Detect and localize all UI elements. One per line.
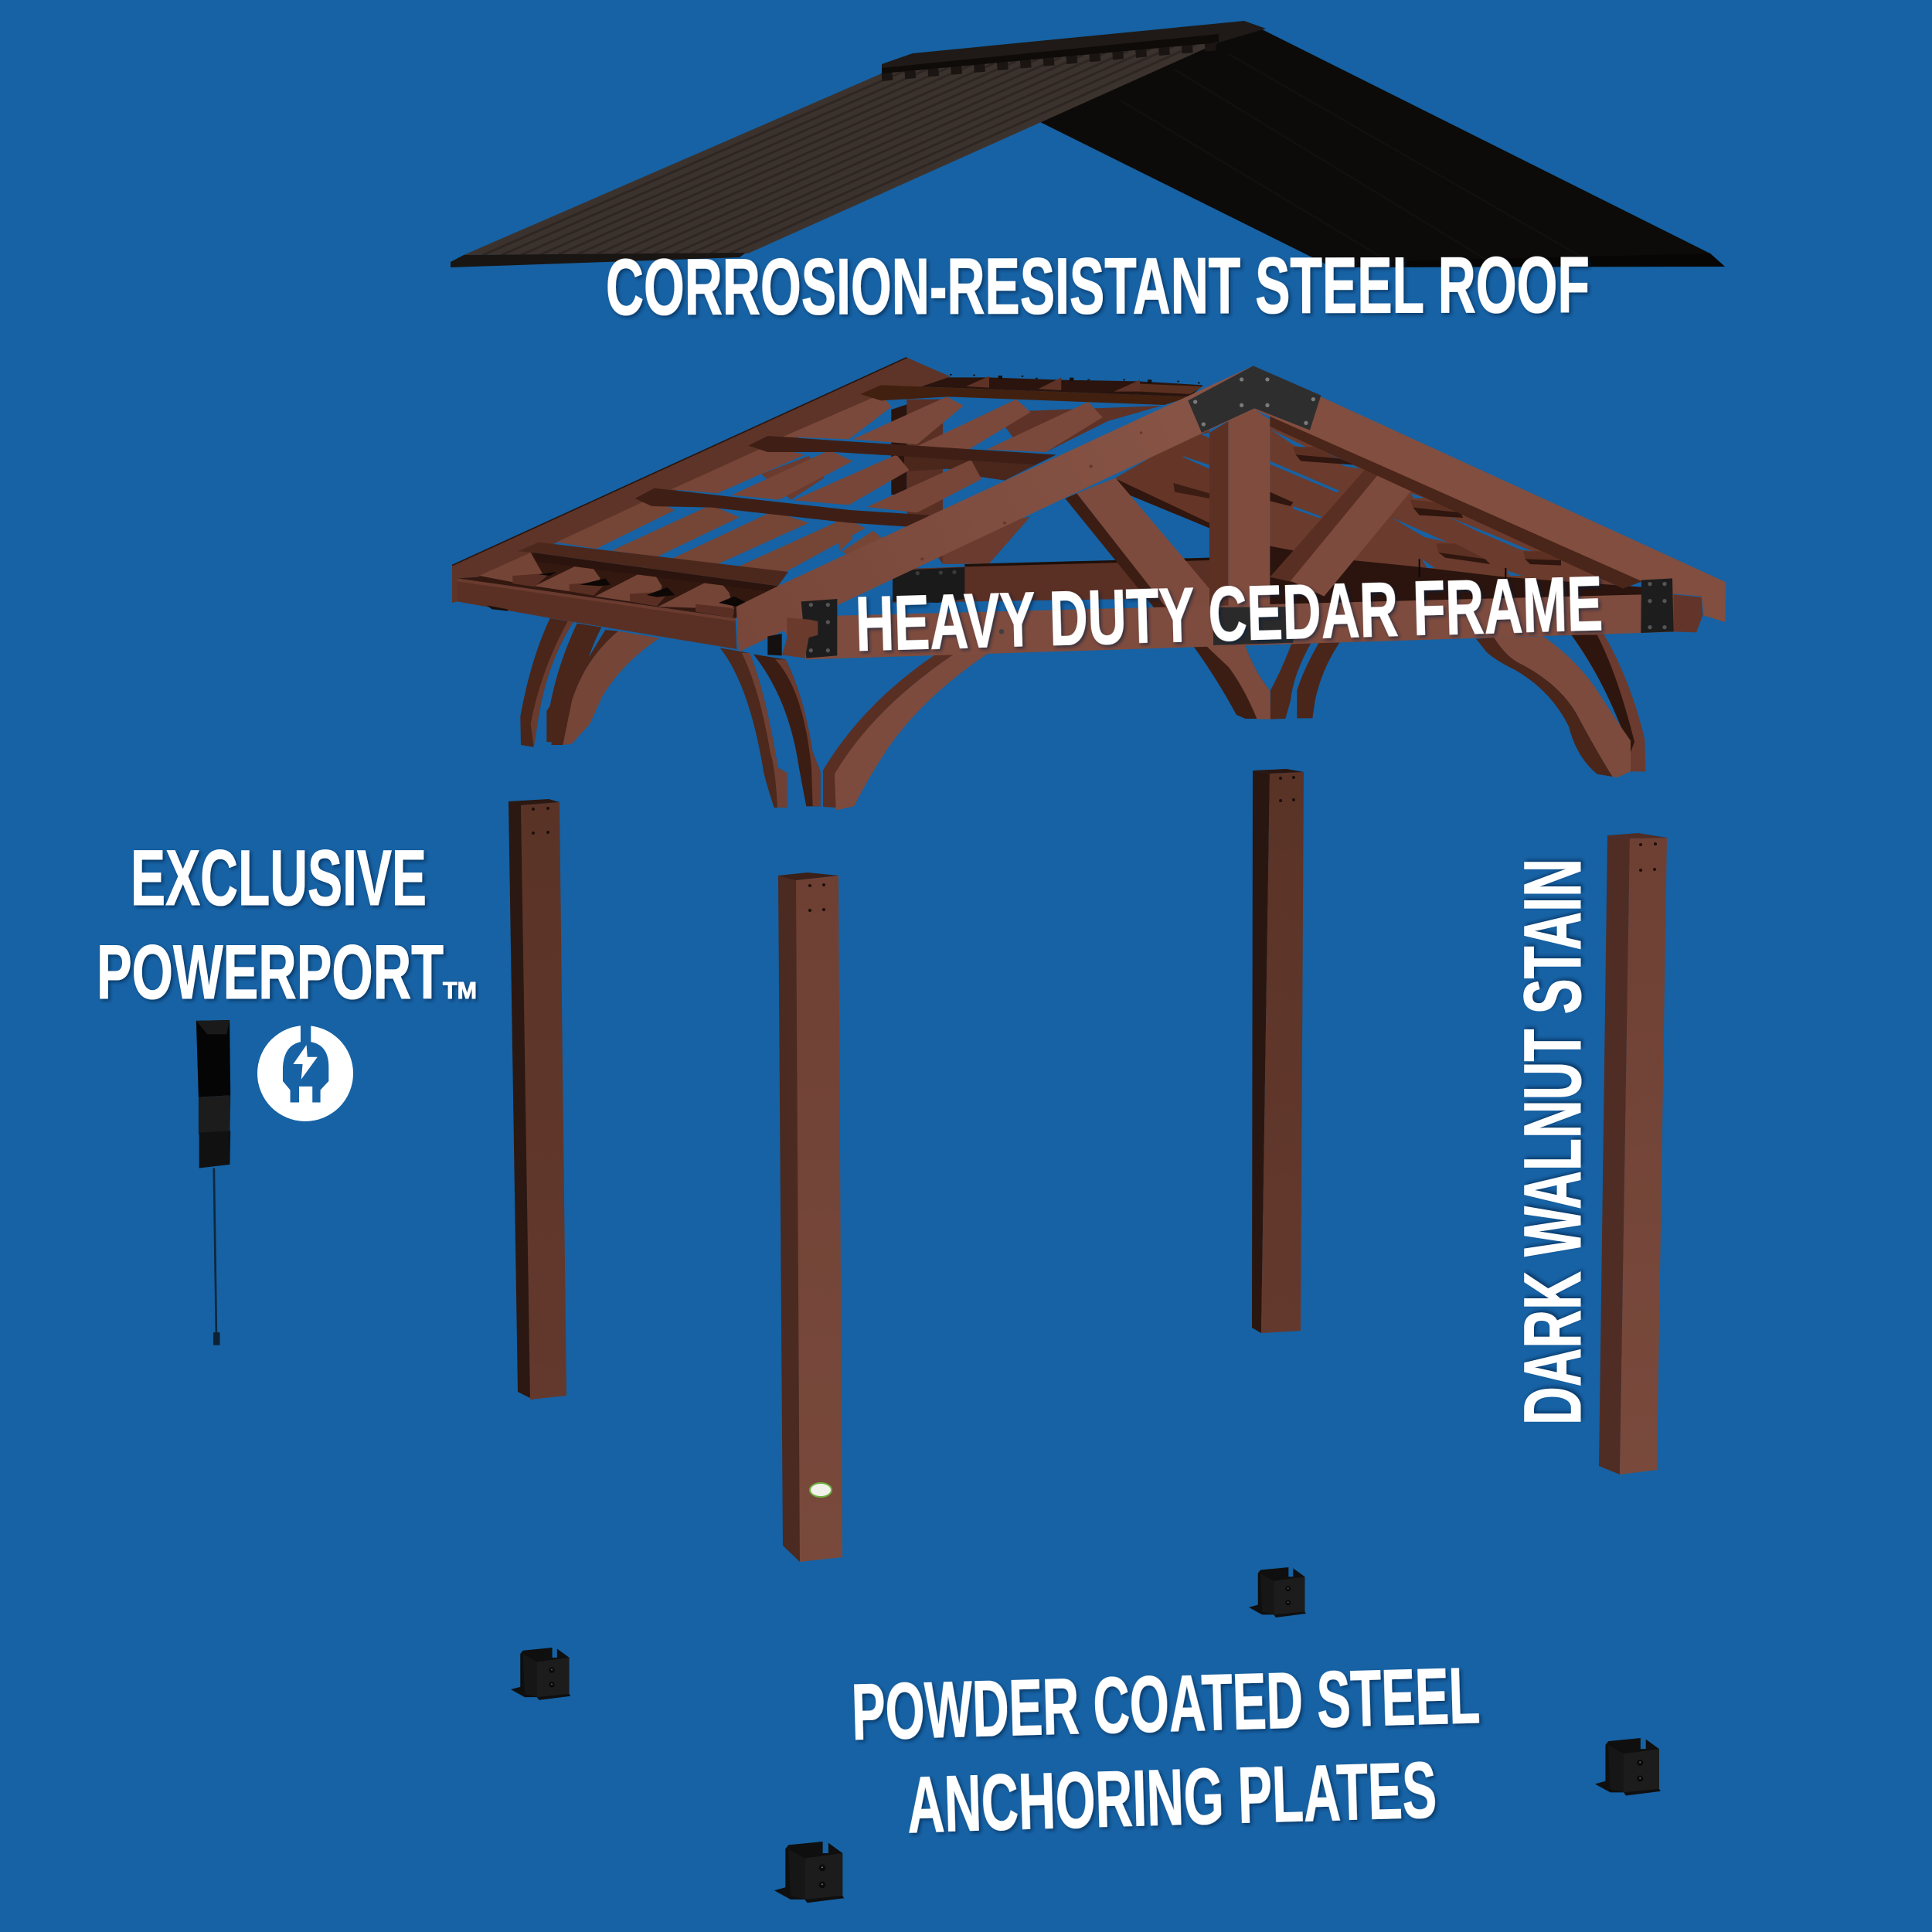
king post lit bbox=[1228, 408, 1270, 609]
panel: cedar frame bbox=[452, 358, 1726, 810]
right slot d bbox=[1410, 493, 1424, 498]
right rear brace shadow bbox=[1571, 635, 1634, 752]
device top highlight bbox=[196, 1020, 230, 1034]
mid brace 2 bbox=[753, 655, 821, 806]
left big brace bbox=[563, 631, 659, 745]
center braces bbox=[1192, 643, 1339, 719]
right rear brace bbox=[1571, 634, 1645, 771]
right front brace underside bbox=[1476, 638, 1613, 777]
long beams row 2 bbox=[671, 446, 981, 512]
heading: stain: DARK WALNUT STAIN bbox=[1508, 859, 1598, 1425]
panel: steel roof bbox=[451, 21, 1725, 267]
anchoring plate near post 3 bbox=[1249, 1567, 1306, 1617]
post 3 holes bbox=[1279, 776, 1295, 802]
purlin 1 shadow bbox=[533, 553, 778, 591]
right truss brace bbox=[1291, 471, 1416, 597]
king post shade bbox=[1209, 421, 1228, 609]
gable top edge bbox=[452, 358, 906, 566]
post 3 side bbox=[1252, 770, 1270, 1333]
rear post dark bbox=[891, 404, 906, 495]
front eave beam bbox=[457, 578, 736, 649]
post 2 logo bbox=[810, 1483, 832, 1497]
dark block below rafter bbox=[767, 634, 782, 655]
heading: powerport: POWERPORT bbox=[97, 929, 444, 1015]
rear plate bbox=[893, 567, 964, 603]
big mid brace side bbox=[823, 653, 956, 808]
center brace 3 bbox=[1297, 643, 1339, 718]
left truss brace bbox=[1077, 478, 1223, 608]
mid brace 1 lit strip bbox=[742, 653, 787, 808]
gable corner inner bbox=[881, 376, 922, 389]
icon: power plug bbox=[257, 1025, 353, 1121]
rear brace bbox=[943, 516, 1030, 564]
post 2 top bbox=[778, 872, 838, 880]
top row strip bbox=[881, 373, 1203, 396]
device middle bbox=[199, 1095, 230, 1134]
rear beam top edge bbox=[964, 558, 1209, 566]
bottom row hardware bbox=[539, 572, 747, 607]
rear lower fill behind truss bbox=[1167, 593, 1350, 609]
post 4 front bbox=[1620, 838, 1667, 1475]
left plate and end block bbox=[782, 599, 837, 658]
under roof right of king post bbox=[1209, 408, 1646, 609]
eave hanger bbox=[487, 605, 508, 611]
roof left face bbox=[464, 43, 1219, 255]
right slot e3 bbox=[1422, 559, 1435, 568]
post 2 front bbox=[796, 876, 842, 1562]
right slot e1 bbox=[1391, 517, 1447, 543]
rear post lit bbox=[906, 400, 943, 564]
roof screws bbox=[929, 373, 1200, 383]
left truss brace side bbox=[1065, 493, 1167, 608]
top row bumps bbox=[966, 376, 989, 388]
plug bolt bbox=[293, 1045, 318, 1080]
left brace 1 bbox=[520, 618, 573, 747]
post 4 bbox=[1599, 833, 1667, 1475]
front rafter bbox=[736, 366, 1253, 651]
rafter knots bbox=[920, 431, 1142, 560]
left under dark band bbox=[1117, 479, 1209, 528]
post 2 side bbox=[778, 876, 800, 1562]
bottom row blocks bbox=[512, 573, 734, 617]
right main rafter bbox=[1253, 366, 1726, 622]
right slot a bbox=[1270, 429, 1360, 469]
left and middle braces bbox=[520, 618, 991, 810]
rear plate bolts bbox=[916, 570, 957, 575]
long beams row 3 bbox=[783, 394, 1103, 452]
right under region bbox=[1270, 420, 1646, 603]
center brace 1 bbox=[1206, 643, 1270, 719]
heading: plates line 1: POWDER COATED STEEL bbox=[850, 1651, 1481, 1757]
center plate bbox=[1213, 607, 1293, 645]
center brace 1 underside bbox=[1192, 643, 1270, 719]
left end block bbox=[782, 617, 818, 658]
post 1 holes bbox=[532, 807, 549, 835]
right slot e2 bbox=[1447, 516, 1532, 551]
left under slot bbox=[1182, 456, 1209, 469]
big mid brace bbox=[835, 651, 991, 810]
front horizontal beam bbox=[783, 594, 1673, 659]
post 4 holes bbox=[1639, 842, 1657, 872]
post 2 bbox=[778, 872, 842, 1562]
right rafter underside bbox=[1270, 413, 1644, 589]
icon disc bbox=[257, 1026, 353, 1121]
anchoring plate near post 2 bbox=[774, 1842, 844, 1903]
left plate bbox=[801, 599, 837, 658]
roof corrugation ribs bbox=[483, 45, 1196, 255]
eave interior bbox=[457, 553, 778, 618]
bottom row beams bbox=[479, 553, 734, 609]
cord plug bbox=[213, 1332, 219, 1345]
center brace 2 bbox=[1270, 643, 1311, 719]
left big brace underside bbox=[551, 630, 618, 745]
end block bbox=[1674, 594, 1702, 632]
purlin 4 bbox=[860, 385, 1190, 405]
ridge cap bbox=[882, 21, 1266, 73]
roof right face ribs bbox=[1121, 54, 1592, 263]
mid brace 2 lit strip bbox=[775, 659, 821, 806]
left under stub bbox=[1173, 483, 1209, 498]
roof right face bbox=[1028, 25, 1725, 267]
post 1 side bbox=[509, 801, 533, 1400]
heading: exclusive: EXCLUSIVE bbox=[131, 834, 427, 922]
eave top strip bbox=[457, 578, 736, 621]
heading: frame: HEAVY DUTY CEDAR FRAME bbox=[854, 560, 1604, 668]
right front brace bbox=[1494, 636, 1631, 777]
right truss brace side bbox=[1270, 466, 1381, 582]
post 1 front bbox=[521, 802, 566, 1400]
icon plug bbox=[283, 1025, 328, 1103]
dark under area bbox=[1270, 546, 1646, 605]
left under beams bbox=[1115, 425, 1209, 526]
post 1 bbox=[509, 799, 566, 1400]
ridge cap lower edge bbox=[882, 34, 1219, 73]
device lower bbox=[199, 1131, 230, 1168]
post 4 top bbox=[1607, 833, 1667, 838]
gusset plate bbox=[1188, 366, 1321, 433]
top row base bbox=[881, 377, 1203, 396]
purlin stubs bbox=[1293, 447, 1561, 560]
anchoring plate near post 1 bbox=[511, 1648, 570, 1700]
purlin 1 bbox=[518, 543, 788, 586]
right eave trim bbox=[1331, 253, 1725, 267]
right plate and end block bbox=[1641, 578, 1702, 633]
top row end bbox=[1140, 384, 1203, 394]
right plate bolts bbox=[1648, 582, 1667, 629]
right slot c bbox=[1293, 506, 1321, 519]
under frame middle bbox=[904, 456, 1036, 481]
purlin 3 bbox=[748, 436, 1056, 465]
diagonal under piece 1 bbox=[761, 456, 825, 500]
post 3 top bbox=[1253, 769, 1304, 774]
post 3 bbox=[1252, 769, 1304, 1333]
left brace 1 lit strip bbox=[531, 621, 573, 747]
rear horizontal beam bbox=[893, 558, 1211, 603]
right slot e4 bbox=[1507, 570, 1522, 576]
left plate bolts bbox=[809, 603, 830, 652]
left gable rafter bbox=[452, 358, 951, 603]
left under gusset slot bbox=[1200, 433, 1209, 438]
right plate bbox=[1641, 578, 1674, 633]
post 2 holes bbox=[808, 883, 825, 912]
post 1 top bbox=[509, 799, 560, 805]
gusset bolts bbox=[1193, 377, 1315, 427]
bracket wires bbox=[1420, 559, 1505, 582]
trademark: TM bbox=[443, 977, 477, 1004]
rear structure bbox=[891, 400, 1350, 609]
purlin stub shadows bbox=[1270, 454, 1561, 566]
left brace 2 bbox=[546, 624, 601, 743]
mid brace 1 bbox=[720, 648, 787, 808]
left eave trim bbox=[451, 253, 746, 267]
device upper bbox=[196, 1020, 230, 1097]
anchoring plate near post 4 bbox=[1595, 1738, 1661, 1795]
right braces bbox=[1476, 634, 1645, 777]
ridge teeth bbox=[882, 46, 1219, 77]
powerport device bbox=[196, 1020, 230, 1345]
center plate and gusset bbox=[1188, 366, 1321, 645]
purlin 2 bbox=[635, 488, 930, 527]
heading: plates line 2: ANCHORING PLATES bbox=[906, 1745, 1437, 1849]
post 3 front bbox=[1261, 772, 1304, 1333]
post 4 side bbox=[1599, 835, 1630, 1475]
under frame upper bbox=[995, 406, 1162, 451]
power cord bbox=[214, 1168, 216, 1333]
beam bolt bbox=[999, 629, 1004, 634]
plug cord slot bbox=[301, 1025, 311, 1046]
right slot b bbox=[1270, 461, 1339, 492]
long beams row 1 bbox=[556, 498, 883, 572]
under roof left of king post bbox=[1065, 425, 1223, 608]
plug body bbox=[283, 1042, 328, 1103]
